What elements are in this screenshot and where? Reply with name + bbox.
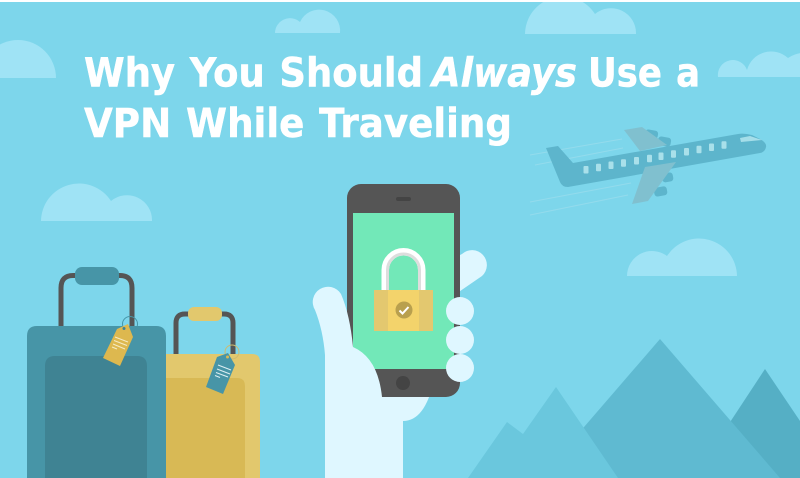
title line 1: Why You Should [84, 50, 423, 96]
handle grip [75, 267, 119, 285]
handle frame [61, 276, 132, 328]
large teal suitcase [27, 267, 166, 478]
fuselage [546, 134, 766, 187]
luggage tag [206, 345, 239, 394]
speaker [396, 197, 411, 201]
handle grip [188, 307, 222, 321]
cloud: right edge [718, 51, 800, 77]
hand and phone [313, 184, 487, 478]
speed lines [530, 139, 631, 215]
clouds [0, 0, 800, 276]
airplane [530, 127, 766, 215]
cloud: top left [0, 40, 56, 78]
yellow suitcase [166, 307, 260, 478]
cloud: top right [525, 0, 636, 34]
lower wing [632, 162, 676, 204]
screen [353, 213, 454, 369]
luggage tag [103, 316, 138, 366]
title line 2: VPN While Traveling [84, 101, 512, 147]
engines [644, 129, 674, 197]
mountains [468, 339, 800, 478]
handle frame [176, 314, 233, 356]
title line 1: Always [429, 50, 577, 96]
phone body [347, 184, 460, 397]
mountain: large centre [540, 339, 780, 478]
title line 1 [84, 50, 700, 96]
home button [396, 376, 410, 390]
padlock [374, 252, 433, 331]
check badge [396, 302, 412, 318]
case body [27, 326, 166, 478]
cloud: top centre [275, 10, 340, 33]
case panel [45, 356, 147, 478]
title line 1: Use a [588, 50, 700, 96]
upper wing [624, 127, 667, 151]
shackle [385, 252, 422, 292]
lock body [374, 290, 433, 331]
title [84, 50, 700, 147]
case body [166, 354, 260, 478]
palm and thumb [313, 287, 403, 478]
case panel [166, 378, 245, 478]
back of hand and far finger [360, 250, 487, 421]
mountain: far right [715, 369, 800, 478]
cloud: left middle [41, 183, 152, 221]
windows [584, 141, 726, 174]
phone [347, 184, 460, 397]
cloud: right middle [627, 238, 737, 276]
cockpit window [740, 136, 762, 142]
mountain: small left [468, 387, 618, 478]
fingers [446, 297, 474, 382]
